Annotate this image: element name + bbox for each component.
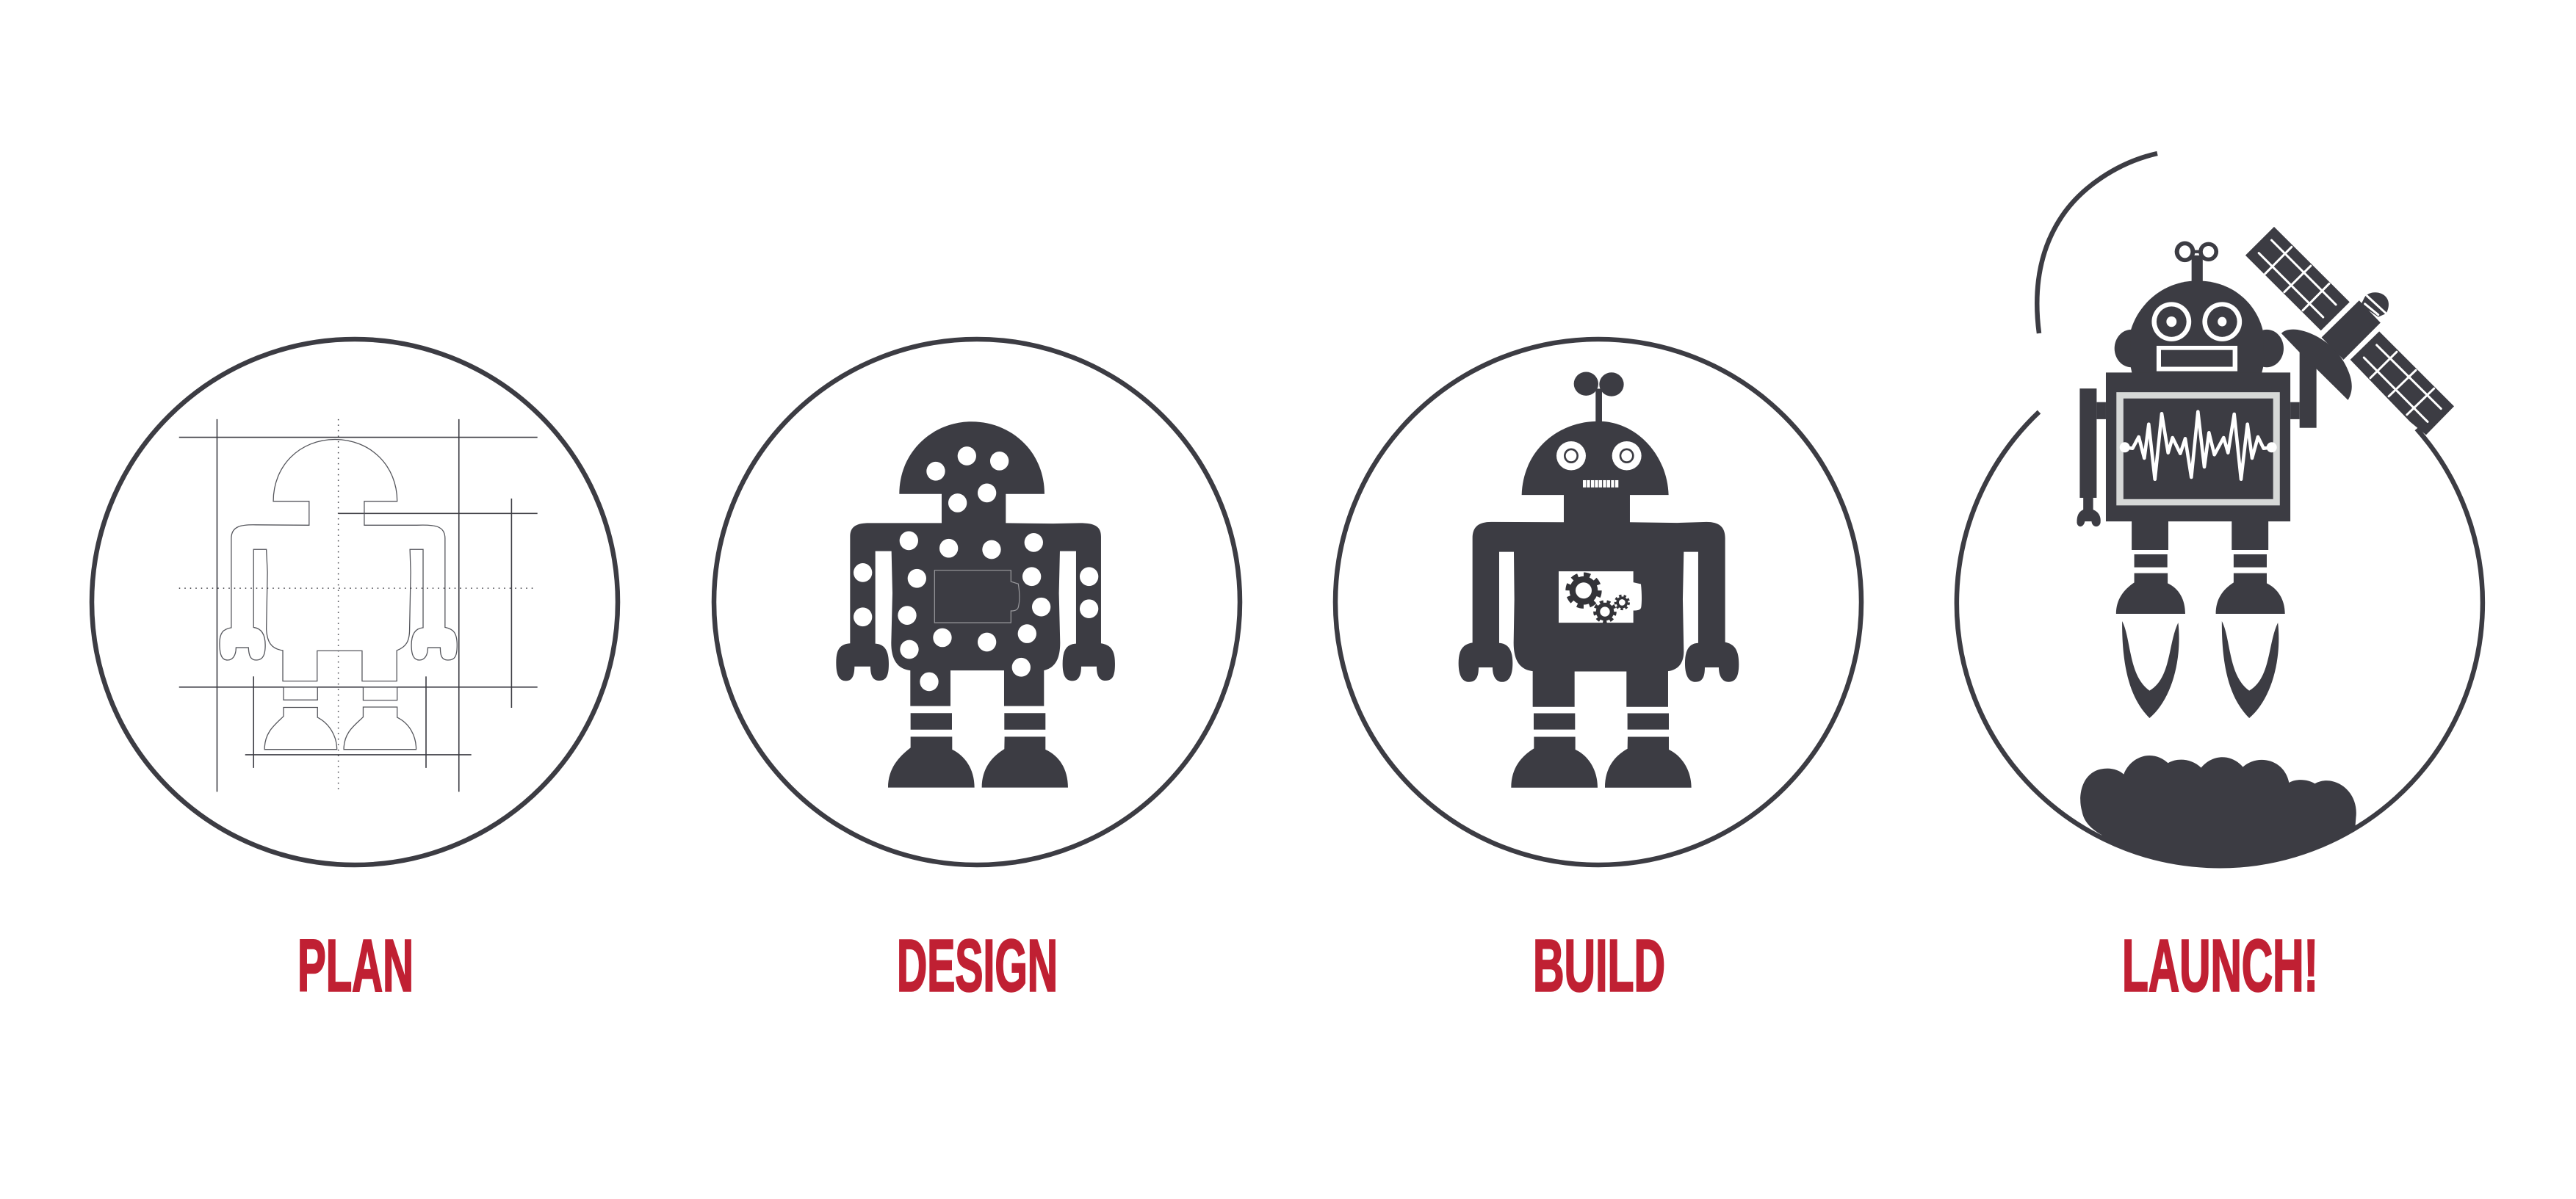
rocket flames [2122, 621, 2279, 718]
panel: launch [1957, 153, 2483, 1007]
launch legs and feet [2116, 521, 2285, 614]
plan circle [92, 339, 618, 865]
launch left arm [2077, 388, 2106, 526]
launch smoke cloud [2080, 756, 2356, 867]
build label: BUILD [1533, 925, 1665, 1007]
design chest battery outline [934, 570, 1020, 623]
build mouth [1583, 480, 1618, 488]
build eyes [1556, 441, 1642, 471]
launch robot upper body with satellite [2077, 227, 2454, 526]
build circle [1335, 339, 1861, 865]
panel: plan [92, 339, 618, 1007]
launch torso [2106, 372, 2290, 521]
build antenna [1574, 372, 1624, 422]
launch label: LAUNCH! [2122, 925, 2318, 1007]
design robot with dots [836, 421, 1115, 788]
launch waveform [2120, 412, 2277, 479]
design circle [714, 339, 1240, 865]
launch robot lower body and smoke [2080, 521, 2356, 867]
satellite [2245, 227, 2454, 435]
build robot with gears [1459, 372, 1739, 788]
build gears [1567, 575, 1628, 622]
blueprint robot outline [220, 439, 457, 750]
plan label: PLAN [297, 925, 414, 1007]
launch right arm and dish [2281, 330, 2352, 428]
design robot legs and feet [888, 713, 1068, 788]
build robot body [1459, 421, 1739, 707]
launch antenna [2175, 242, 2218, 283]
design dots [854, 446, 1098, 691]
design label: DESIGN [897, 925, 1058, 1007]
launch head [2115, 280, 2284, 374]
blueprint construction lines [179, 419, 538, 792]
launch broken circle [1957, 412, 2483, 866]
design robot body [836, 421, 1115, 706]
panel: design [714, 339, 1240, 1007]
build chest battery [1559, 571, 1642, 623]
launch upper arc [2037, 153, 2157, 333]
plan blueprint robot [179, 419, 538, 792]
build robot legs and feet [1511, 713, 1692, 788]
panel: build [1335, 339, 1861, 1007]
